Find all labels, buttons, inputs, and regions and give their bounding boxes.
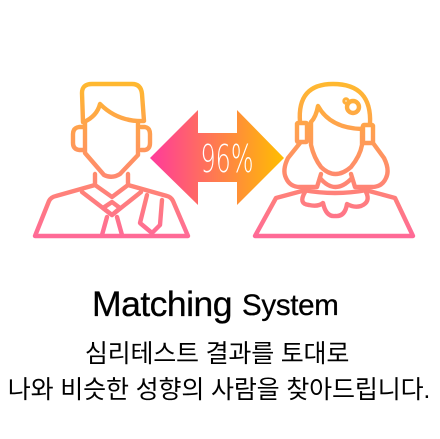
- title: [92, 284, 339, 324]
- title: Matching: [92, 284, 232, 324]
- icon: man: [35, 84, 188, 236]
- text block: description: 나와 비슷한 성향의 사람을 찾아드립니다.: [8, 376, 430, 404]
- title: System: [242, 289, 339, 322]
- text block: description: [8, 340, 430, 404]
- percentage label: 96%: [200, 137, 254, 181]
- icon: woman: [255, 84, 413, 236]
- double arrow: [150, 110, 284, 205]
- text block: description: 심리테스트 결과를 토대로: [85, 340, 349, 368]
